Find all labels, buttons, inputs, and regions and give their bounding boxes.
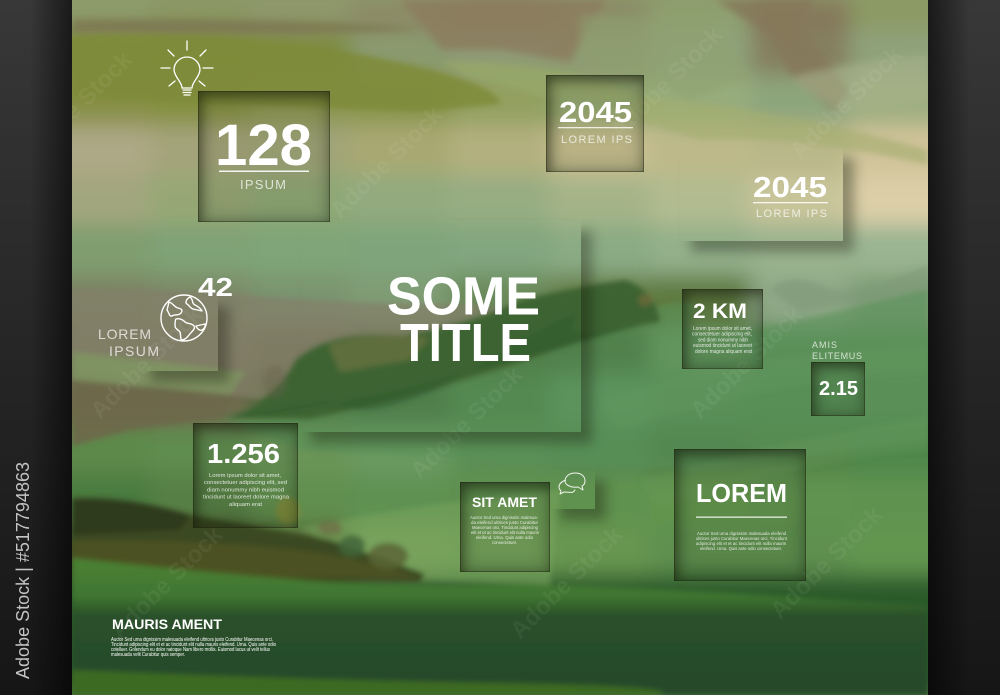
text block [692,326,753,355]
number: 2045: 2045 [559,97,632,129]
stock watermark: Adobe Stock [685,301,808,424]
text block: euismod tincidunt ut laoreet [693,343,753,349]
label: ipsum: IPSUM [240,177,286,192]
number: 1.256: 1.256 [207,438,280,469]
panel: 2.15 [811,362,865,416]
text block: consectetuer adipiscing elit, [692,332,752,338]
label: amis elitemus: ELITEMUS [812,351,862,361]
stock watermark: Adobe Stock [605,21,728,144]
number: 2045: 2045 [753,172,827,204]
panel: center title [300,220,581,432]
text block: consectetuer adipiscing elit, sed [204,480,287,486]
stock watermark: Adobe Stock [325,101,448,224]
text block: sed diam nonummy nibh [698,338,748,344]
divider and text block: ultrices justo Curabitur Maecenas orci. Tincidunt [696,536,788,542]
body copy: malesuada velit Curabitur quis semper. [111,652,185,658]
text block: Auctor Sed urna dignissim malesua- [470,515,538,521]
tree line [222,265,928,419]
body copy: Auctor Sed urna dignissim malesuada eleifend ultrices justo Curabitur Maecenas orci. [111,637,273,643]
label: lorem ipsum: LOREM [98,326,151,342]
panel: sit amet [460,482,550,572]
mid hills [222,288,928,470]
divider and text block [696,516,788,552]
panel: 2045 raised [680,148,843,241]
yellow hill [72,35,500,112]
body copy: Tincidunt adipiscing elit et et ac tincidunt elit nulla mauris eleifend. Urna. Quis ante odio [111,642,276,648]
heading: sit amet: SIT AMET [472,494,537,510]
label: lorem ips [753,202,828,220]
text block: dolore magna aliquam erat [695,349,753,355]
brown field [72,288,560,400]
text block: da eleifend ultrices justo Curabitur [471,520,538,526]
text block: mauris ament [111,617,276,658]
stock watermark: Adobe Stock [505,521,628,644]
label: lorem ips: LOREM IPS [756,208,827,220]
panel: 2 km [682,289,763,369]
text block: eleifend. Urna. Quis ante odio [476,535,533,541]
text block: aliquam erat [229,502,262,508]
text block: consectetuer. [492,540,517,546]
divider and text block: eleifend. Urna. Quis ante odio consectetuer. [700,546,782,552]
text block: Lorem ipsum dolor sit amet, [693,326,752,332]
label: amis elitemus [812,340,862,361]
divider and text block: Auctor Sed urna dignissim malesuada eleifend [697,531,786,537]
panel: 2.15: 2.15 [819,378,858,400]
panel: globe 42 [140,295,218,371]
icon: chat bubbles [558,472,586,494]
panel: 2045 inset [546,75,644,172]
panel: chat raised [550,470,595,509]
divider and text block: adipiscing elit et et ac tincidunt elit nulla mauris [696,541,787,547]
text block: Maecenas orci. Tincidunt adipiscing [472,525,538,531]
stock watermark: Adobe Stock [85,301,208,424]
stock watermark: Adobe Stock [105,521,228,644]
stock watermark: Adobe Stock [765,501,888,624]
panel: 1.256 [193,423,298,528]
text block [470,515,540,546]
label: lorem ips: LOREM IPS [561,134,632,146]
vineyard and bottom hills [72,490,928,695]
label: amis elitemus: AMIS [812,340,837,350]
text block: Lorem ipsum dolor sit amet, [209,473,281,479]
number: 128: 128 [215,113,312,178]
label: lorem ipsum: IPSUM [109,343,159,359]
icon: globe [160,294,208,342]
text block: tincidunt ut laoreet dolore magna [203,494,290,500]
body copy [111,637,276,658]
heading: some title: TITLE [400,313,531,373]
text block: diam nonummy nibh euismod [207,488,284,494]
panel: lorem [674,449,806,581]
text block [203,473,290,508]
heading: 2 km: 2 KM [693,300,747,323]
number: 42: 42 [198,272,233,302]
panel: 128 ipsum [198,91,330,222]
body copy: cotelluer. Grilendum eu dolor natoque Nam libero mollis. Euismod lacus ut velit tellus [111,647,270,653]
distant hills and brown ridges [72,0,928,112]
stock watermark: Adobe Stock [785,41,908,164]
stock watermark: Adobe Stock [405,361,528,484]
heading: lorem: LOREM [696,478,787,508]
text block: elit et et ac tincidunt elit nulla mauris [471,530,540,536]
heading: some title: SOME [387,266,540,326]
heading: mauris ament: MAURIS AMENT [112,617,223,632]
stock credit: Adobe Stock | #517794863 [13,462,33,679]
heading: some title [387,266,540,373]
icon: light bulb [160,40,214,96]
label: lorem ipsum [98,326,159,359]
